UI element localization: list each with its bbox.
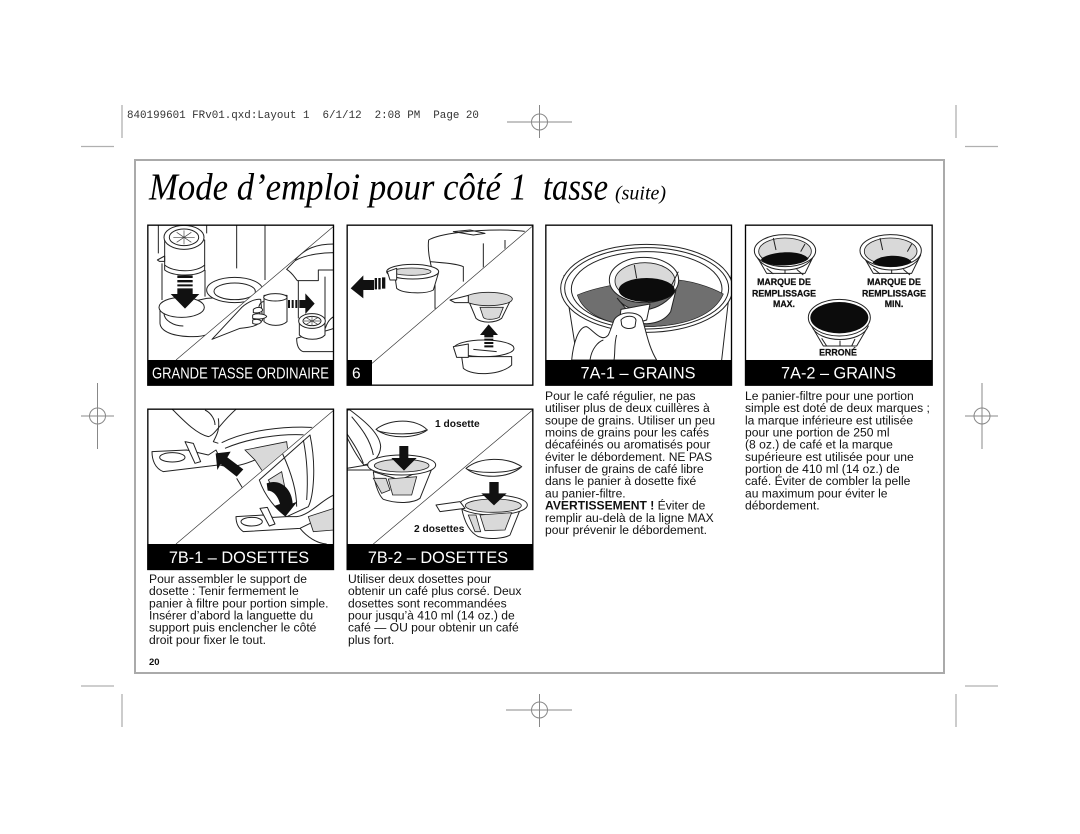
text block: 7A-1: éviter le débordement. NE PAS: [545, 450, 712, 464]
print slug line: 840199601 FRv01.qxd:Layout 1 6/1/12 2:08 PM Page 20: [127, 110, 479, 122]
text block: 7B-2: Utiliser deux dosettes pour: [348, 572, 491, 586]
text block: 7A-1: pour prévenir le débordement.: [545, 523, 707, 537]
text block: 7B-2: [348, 572, 521, 647]
page frame: [135, 160, 944, 673]
label: 7A-1 grains: 7A-1 – GRAINS: [581, 364, 696, 382]
text block: 7A-1: AVERTISSEMENT ! Éviter de: [545, 498, 706, 512]
panel: 7A-1 grains: [545, 225, 733, 386]
text block: 7A-2: café. Éviter de combler la pelle: [745, 473, 911, 488]
text block: 7A-1: infuser de grains de café libre: [545, 462, 704, 476]
fill mark captions: MIN.: [885, 299, 903, 309]
panel: grande tasse ordinaire: [147, 225, 334, 386]
title: (suite): [615, 182, 666, 204]
fill mark captions: MAX.: [773, 299, 795, 309]
fill mark captions: MARQUE DE: [757, 277, 811, 287]
label: 7B-2 dosettes: 7B-2 – DOSETTES: [368, 549, 508, 567]
text block: 7B-2: obtenir un café plus corsé. Deux: [348, 584, 521, 598]
text block: 7B-2: plus fort.: [348, 633, 394, 647]
label: step 6: 6: [352, 366, 361, 382]
printer crop and registration marks: [81, 105, 998, 727]
label: grande tasse ordinaire: GRANDE TASSE ORDINAIRE: [152, 366, 329, 382]
text block: 7A-1: au panier-filtre.: [545, 486, 626, 500]
text block: 7A-1: remplir au-delà de la ligne MAX: [545, 511, 714, 525]
panel: 7B-2 dosettes: [347, 409, 533, 570]
fill mark captions: MARQUE DE: [867, 277, 921, 287]
text block: 7A-1: décaféinés ou aromatisés pour: [545, 438, 710, 452]
text block: 7B-1: [149, 572, 328, 647]
text block: 7A-1: dans le panier à dosette fixé: [545, 474, 697, 488]
text block: 7B-1: panier à filtre pour portion simple.: [149, 596, 328, 610]
icon: basket at max mark: [754, 235, 816, 275]
text block: 7A-2: au maximum pour éviter le: [745, 486, 888, 500]
text block: 7A-2: débordement.: [745, 498, 820, 512]
text block: 7A-2: simple est doté de deux marques ;: [745, 401, 930, 415]
panel: step 6: [347, 225, 533, 386]
callout: 2 dosettes: 2 dosettes: [414, 524, 465, 535]
text block: 7A-2: supérieure est utilisée pour une: [745, 450, 914, 464]
icon: basket at min mark: [860, 235, 921, 275]
panel: 7A-2 grains: [745, 225, 933, 386]
text block: 7A-2: la marque inférieure est utilisée: [745, 414, 913, 428]
text block: 7B-2: pour jusqu’à 410 ml (14 oz.) de: [348, 608, 515, 622]
text block: 7A-1: Pour le café régulier, ne pas: [545, 389, 696, 403]
title: Mode d’emploi pour côté 1: [148, 166, 527, 208]
text block: 7A-2: portion de 410 ml (14 oz.) de: [745, 462, 900, 476]
text block: 7B-1: Pour assembler le support de: [149, 572, 307, 586]
text block: 7A-2: [745, 389, 930, 512]
fill mark captions: [752, 277, 926, 358]
fill mark captions: REMPLISSAGE: [862, 288, 926, 298]
icon: overfilled basket: [808, 299, 870, 346]
text block: 7A-1: soupe de grains. Utiliser un peu: [545, 414, 715, 428]
panel: 7B-1 dosettes: [147, 409, 334, 570]
label: 7B-1 dosettes: 7B-1 – DOSETTES: [169, 549, 309, 567]
text block: 7A-1: utiliser plus de deux cuillères à: [545, 401, 710, 415]
text block: 7B-1: support puis enclencher le côté: [149, 620, 317, 634]
text block: 7B-2: dosettes sont recommandées: [348, 596, 507, 610]
text block: 7A-2: pour une portion de 250 ml: [745, 426, 890, 440]
page number: 20: [149, 657, 160, 668]
label: 7A-2 grains: 7A-2 – GRAINS: [781, 364, 896, 382]
text block: 7A-2: Le panier-filtre pour une portion: [745, 389, 914, 403]
title: tasse: [543, 166, 608, 208]
text block: 7B-1: droit pour fixer le tout.: [149, 633, 266, 647]
callout: 1 dosette: 1 dosette: [435, 419, 480, 430]
text block: 7B-1: Insérer d’abord la languette du: [149, 608, 313, 622]
text block: 7A-1: moins de grains pour les cafés: [545, 426, 709, 440]
text block: 7B-1: dosette : Tenir fermement le: [149, 584, 299, 598]
fill mark captions: REMPLISSAGE: [752, 288, 816, 298]
text block: 7A-2: (8 oz.) de café et la marque: [745, 438, 893, 452]
text block: 7B-2: café — OU pour obtenir un café: [348, 620, 519, 634]
text block: 7A-1: [545, 389, 715, 537]
fill mark captions: ERRONÉ: [819, 348, 857, 358]
